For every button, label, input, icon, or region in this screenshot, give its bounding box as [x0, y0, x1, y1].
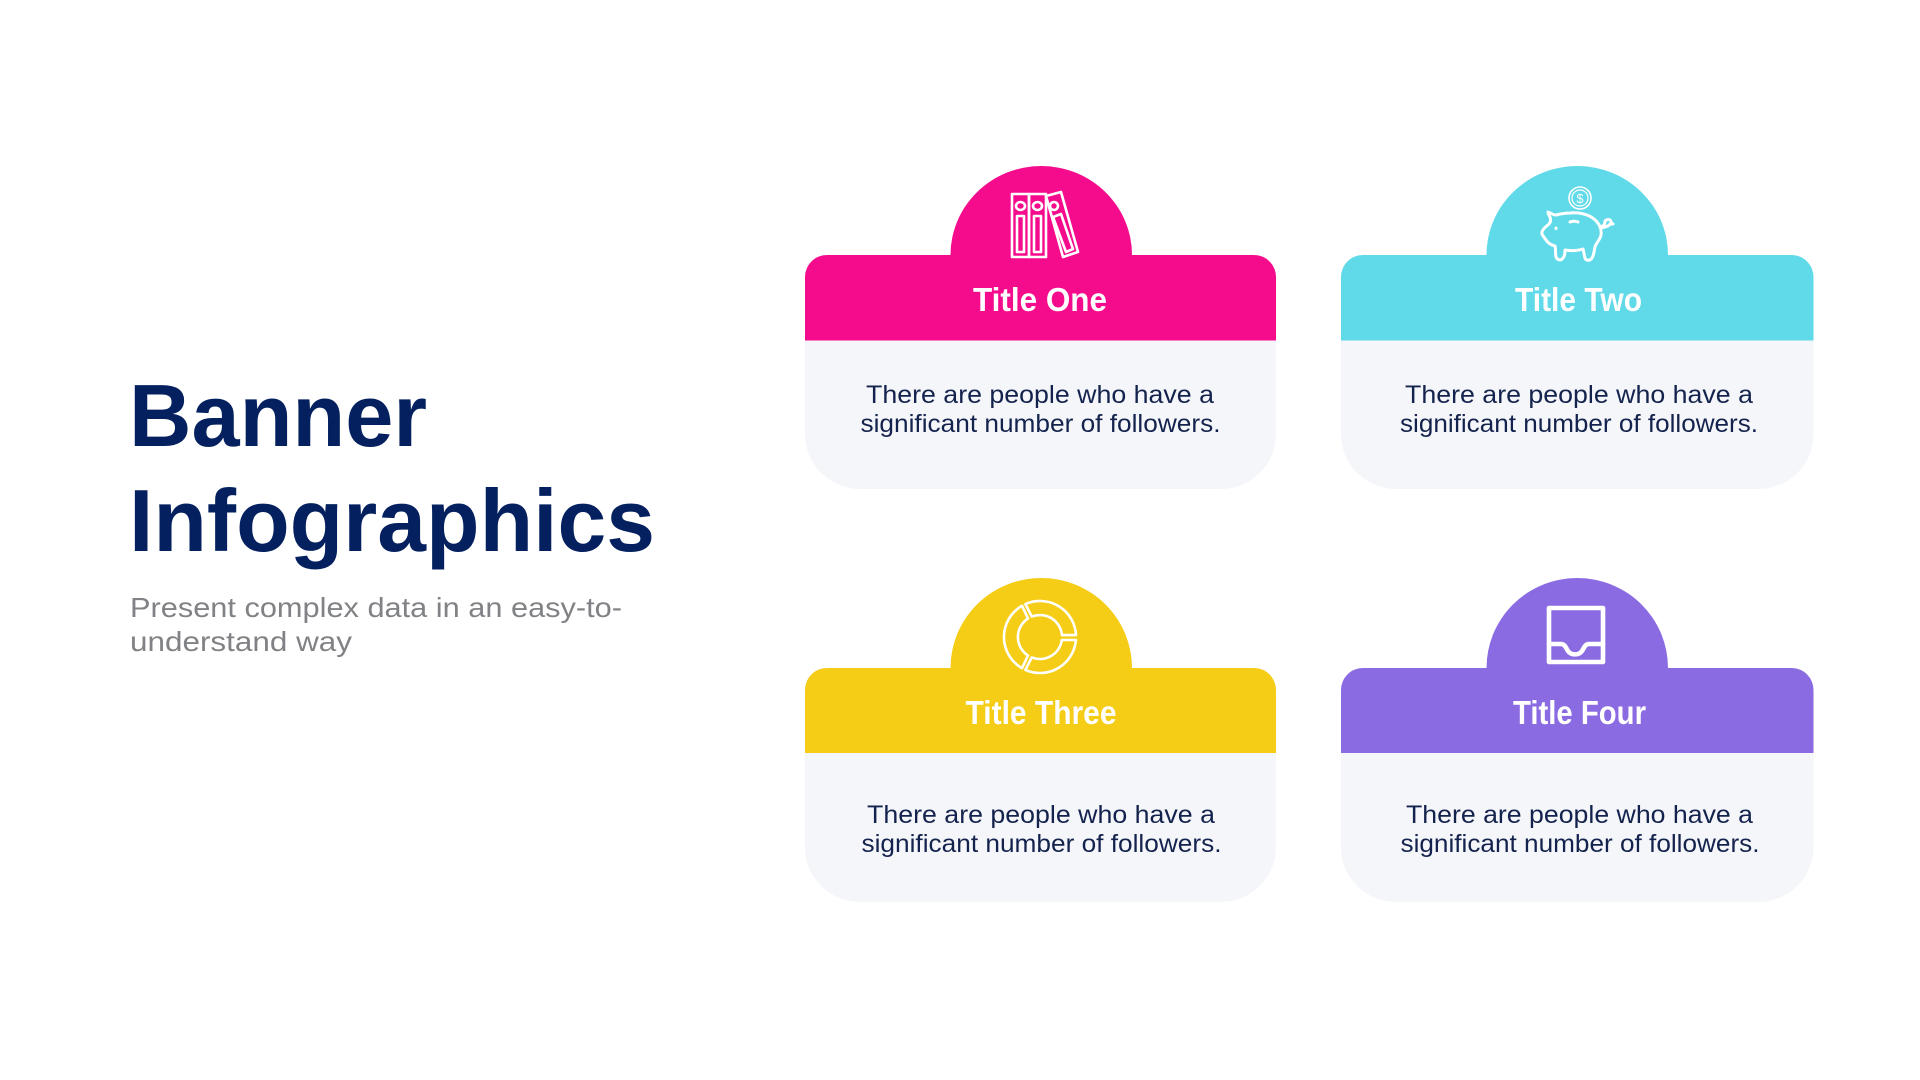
card two text: There are people who have a: [1405, 381, 1753, 409]
card three text: [862, 801, 1222, 858]
title: [129, 366, 655, 570]
card one banner: [805, 166, 1276, 340]
panel: card one: [805, 166, 1276, 489]
card three title: Title Three: [966, 694, 1116, 731]
card four text: There are people who have a: [1406, 801, 1753, 829]
subtitle: Present complex data in an easy-to-: [130, 592, 622, 623]
card one title: Title One: [973, 281, 1107, 318]
panel: card two: [1341, 166, 1814, 489]
card four text: significant number of followers.: [1400, 830, 1760, 858]
panel: card three: [805, 578, 1276, 902]
card four banner: [1341, 578, 1814, 753]
icon: piggy bank: $: [1576, 191, 1584, 206]
card three text: There are people who have a: [867, 801, 1215, 829]
card two text: significant number of followers.: [1400, 410, 1758, 438]
icon: piggy bank: [1542, 187, 1613, 260]
card two title: Title Two: [1515, 281, 1642, 318]
card two body: [1341, 340, 1814, 489]
card one text: [860, 381, 1220, 438]
card four body: [1341, 753, 1814, 902]
card one body: [805, 340, 1276, 489]
card four title: Title Four: [1513, 694, 1646, 731]
title: Infographics: [129, 471, 655, 570]
icon: donut chart: [1004, 601, 1076, 673]
title: Banner: [129, 366, 427, 465]
card four text: [1400, 801, 1760, 858]
card one text: There are people who have a: [866, 381, 1214, 409]
icon: inbox tray: [1549, 608, 1603, 662]
card one text: significant number of followers.: [860, 410, 1220, 438]
subtitle: understand way: [130, 626, 352, 657]
card three body: [805, 753, 1276, 902]
subtitle: [130, 592, 622, 657]
panel: card four: [1341, 578, 1814, 902]
card three banner: [805, 578, 1276, 753]
icon: binders: [1012, 192, 1078, 257]
card two text: [1400, 381, 1758, 438]
card two banner: [1341, 166, 1814, 340]
card three text: significant number of followers.: [862, 830, 1222, 858]
